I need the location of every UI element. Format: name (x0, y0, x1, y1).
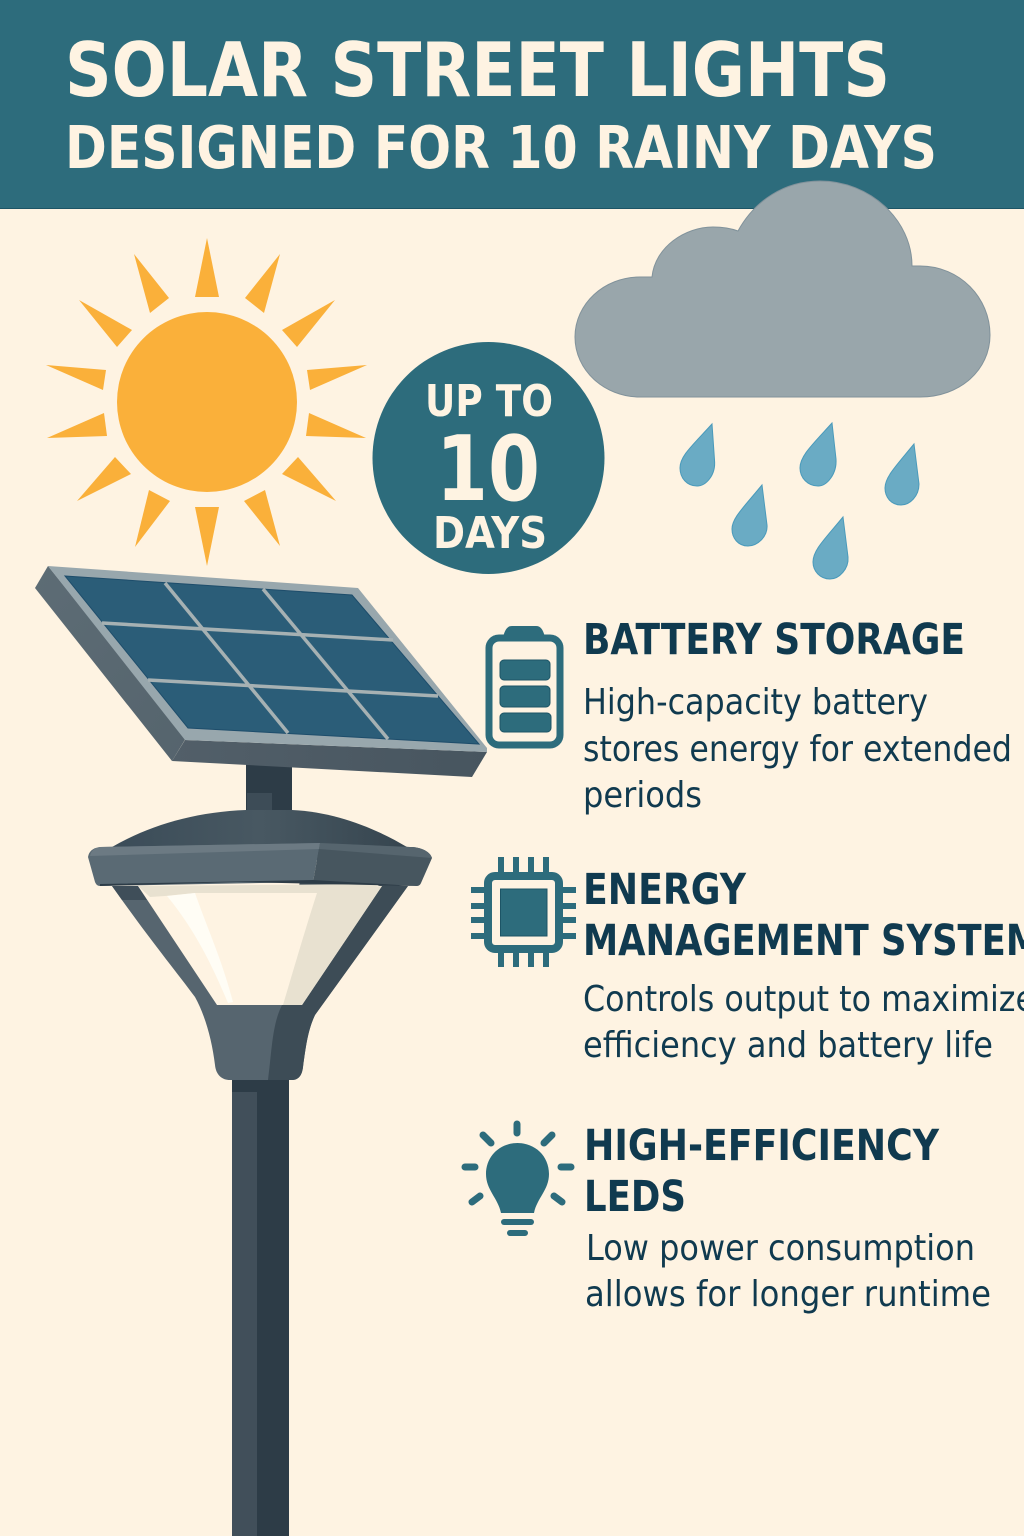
section: high-efficiency LEDs (584, 1121, 991, 1315)
street lamp head (88, 810, 432, 1080)
section: energy management system (583, 865, 1024, 1066)
section: battery storage (583, 615, 1012, 816)
badge: up to 10 days (372, 342, 604, 574)
badge: up to 10 days: DAYS (433, 508, 547, 559)
section: energy management system: ENERGY (583, 865, 747, 915)
header banner (0, 0, 1024, 209)
section: high-efficiency LEDs: LEDS (584, 1172, 686, 1222)
solar panel mount (246, 760, 292, 812)
icon: sun (46, 238, 367, 566)
section: high-efficiency LEDs: HIGH-EFFICIENCY (584, 1121, 940, 1171)
icon: LED bulb (465, 1124, 571, 1236)
section: high-efficiency LEDs: Low power consumption (586, 1228, 975, 1269)
solar panel (35, 566, 487, 777)
title: SOLAR STREET LIGHTS (65, 26, 890, 114)
icon: chip (471, 857, 576, 967)
street light pole (232, 1078, 289, 1536)
icon: battery (489, 626, 560, 745)
icon: rain cloud (575, 181, 990, 579)
badge: up to 10 days: 10 (436, 417, 540, 522)
badge: up to 10 days: UP TO (425, 376, 553, 427)
section: battery storage: periods (583, 775, 702, 816)
section: battery storage: High-capacity battery (583, 682, 928, 723)
section: high-efficiency LEDs: allows for longer runtime (585, 1274, 991, 1315)
title (65, 26, 937, 182)
